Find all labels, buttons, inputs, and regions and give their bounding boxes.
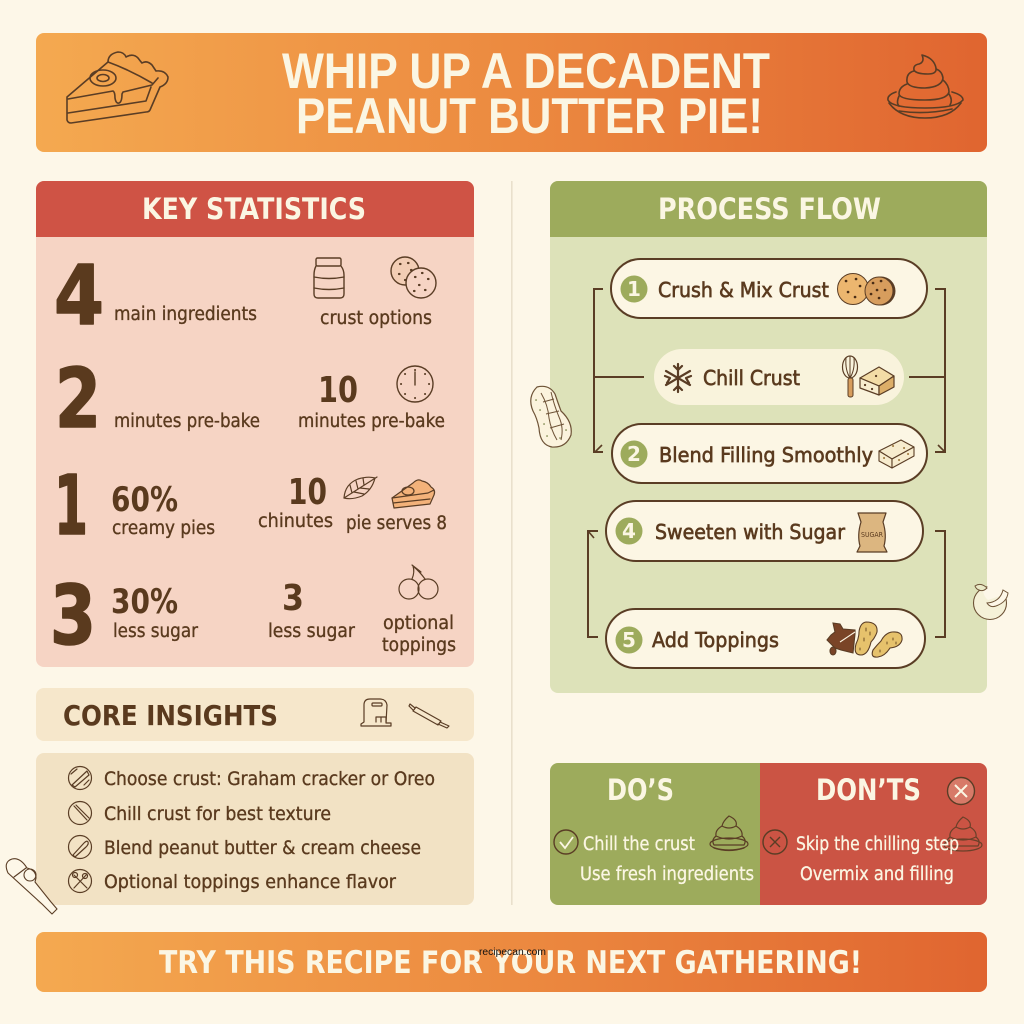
icon: swirl do: [710, 816, 748, 850]
stat: optional toppings: [382, 613, 456, 656]
stat: 4 main ingredients: 4: [54, 249, 104, 344]
icon: chocolate and peanuts: [827, 622, 902, 657]
panel: do's: DO’S: [607, 773, 674, 807]
icon: cookies: [391, 257, 436, 298]
icon: jar: [314, 258, 344, 298]
step 1: crush and mix crust: 1: [627, 277, 641, 301]
insight: chill crust: Chill crust for best texture: [104, 803, 331, 825]
stat: 10 minutes pre-bake: [298, 370, 445, 432]
panel: don'ts: Skip the chilling step: [796, 834, 959, 855]
stat: 10 chinutes: chinutes: [258, 511, 333, 532]
panel: don'ts: DON’TS: [816, 773, 921, 807]
stat: 2 minutes pre-bake: 2: [55, 352, 101, 447]
connector: top left bracket: [594, 289, 644, 452]
footer banner: TRY THIS RECIPE FOR YOUR NEXT GATHERING!: [159, 945, 862, 981]
stat: 3 less sugar: [268, 578, 355, 642]
stat: 3, 30% less sugar: 3: [50, 569, 96, 664]
panel: process flow: [550, 181, 987, 693]
step 5: add toppings: 5: [622, 628, 636, 652]
stat: 10 chinutes: 10: [288, 472, 327, 513]
stat: 10 chinutes: [258, 472, 333, 532]
title banner: [36, 33, 987, 152]
stat: 4 main ingredients: main ingredients: [114, 304, 257, 325]
panel: core insights list: [36, 753, 474, 905]
panel: do's: Use fresh ingredients: [580, 864, 754, 885]
panel: key statistics: [36, 181, 474, 667]
stat: 1, 60% creamy pies: 60%: [111, 480, 178, 520]
panel: do's: [550, 763, 760, 905]
icon: pie slice small: [392, 480, 435, 508]
stat: 10 minutes pre-bake: 10: [318, 370, 358, 411]
icon: whisk: [842, 356, 858, 397]
process flow header: [550, 181, 987, 237]
icon: crossed tools circle: [68, 870, 92, 892]
icon: pie slice: [67, 52, 168, 123]
icon: decorative rolling pin: [6, 859, 57, 914]
icon: spatula circle: [68, 836, 92, 858]
stat: 3, 30% less sugar: 30%: [111, 582, 178, 622]
icon: leaf: [344, 477, 377, 499]
watermark: recipecan.com: [479, 947, 546, 958]
process flow header: PROCESS FLOW: [658, 192, 881, 226]
step 4: sweeten: [606, 501, 923, 561]
insight: optional toppings: Optional toppings enhance flavor: [104, 871, 396, 893]
insight: blend: Blend peanut butter & cream cheese: [104, 837, 421, 859]
title text: [282, 43, 770, 144]
panel: don'ts: [760, 763, 987, 905]
key statistics header: [36, 181, 474, 237]
stat: 10 minutes pre-bake: minutes pre-bake: [298, 411, 445, 432]
panel: core insights heading: CORE INSIGHTS: [63, 699, 278, 732]
icon: cookies pair: [838, 274, 896, 306]
icon: decorative peanut: [531, 386, 571, 447]
step 5: add toppings: Add Toppings: [652, 628, 779, 652]
stat: pie serves 8: pie serves 8: [346, 513, 447, 534]
step 2: blend filling: Blend Filling Smoothly: [659, 443, 873, 467]
icon: butter block: [879, 440, 914, 468]
stat: 1, 60% creamy pies: [54, 459, 215, 554]
icon: swirl don't: [944, 817, 982, 851]
icon: sugar sack: SUGAR: [861, 531, 883, 539]
connector: top right bracket: [909, 289, 945, 452]
stat: 3 less sugar: 3: [282, 578, 304, 619]
icon: pin circle: [68, 802, 92, 824]
title text: PEANUT BUTTER PIE!: [296, 88, 763, 144]
stat: 2 minutes pre-bake: [55, 352, 260, 447]
panel: do's: Chill the crust: [583, 834, 695, 855]
stat: optional toppings: optional: [383, 613, 454, 634]
icon: stand mixer: [361, 699, 391, 726]
panel: core insights heading: [36, 688, 474, 741]
step 1: crush and mix crust: Crush & Mix Crust: [658, 278, 829, 302]
icon: check: [554, 830, 578, 854]
icon: clock: [397, 366, 433, 402]
key statistics header: KEY STATISTICS: [142, 192, 366, 226]
footer banner: [36, 932, 987, 992]
stat: 3, 30% less sugar: less sugar: [113, 621, 198, 642]
icon: decorative apple sketch: [974, 580, 1008, 620]
icon: x circle small: [763, 830, 787, 854]
icon: sugar sack: [857, 513, 887, 552]
stat: 4 main ingredients: [54, 249, 257, 344]
connector: lower left arrow: [588, 531, 598, 637]
stat: crust options: crust options: [320, 308, 432, 329]
stat: optional toppings: toppings: [382, 635, 456, 656]
panel: don'ts: Overmix and filling: [800, 864, 954, 885]
step 1: crush and mix crust: [611, 259, 927, 318]
connector: lower right bracket: [935, 531, 945, 637]
step: chill crust: [654, 349, 904, 405]
icon: rolling pin: [409, 704, 449, 728]
stat: 3 less sugar: less sugar: [268, 621, 355, 642]
stat: 2 minutes pre-bake: minutes pre-bake: [114, 411, 260, 432]
icon: cherries: [399, 565, 438, 599]
icon: snowflake: [665, 364, 691, 392]
title text: WHIP UP A DECADENT: [282, 43, 770, 99]
step 2: blend filling: [612, 424, 927, 483]
icon: x circle: [948, 778, 974, 804]
icon: cream swirl: [888, 55, 963, 118]
stat: 3, 30% less sugar: [50, 569, 198, 664]
insight: choose crust: Choose crust: Graham cracker or Oreo: [104, 768, 435, 790]
step 5: add toppings: [606, 609, 925, 668]
step 4: sweeten: 4: [622, 519, 636, 543]
icon: cheese block: [860, 367, 894, 395]
stat: 1, 60% creamy pies: creamy pies: [112, 518, 215, 539]
icon: graham cracker: [68, 766, 92, 790]
step 4: sweeten: Sweeten with Sugar: [655, 520, 846, 544]
step: chill crust: Chill Crust: [703, 366, 800, 390]
step 2: blend filling: 2: [627, 442, 641, 466]
stat: 1, 60% creamy pies: 1: [54, 459, 88, 554]
